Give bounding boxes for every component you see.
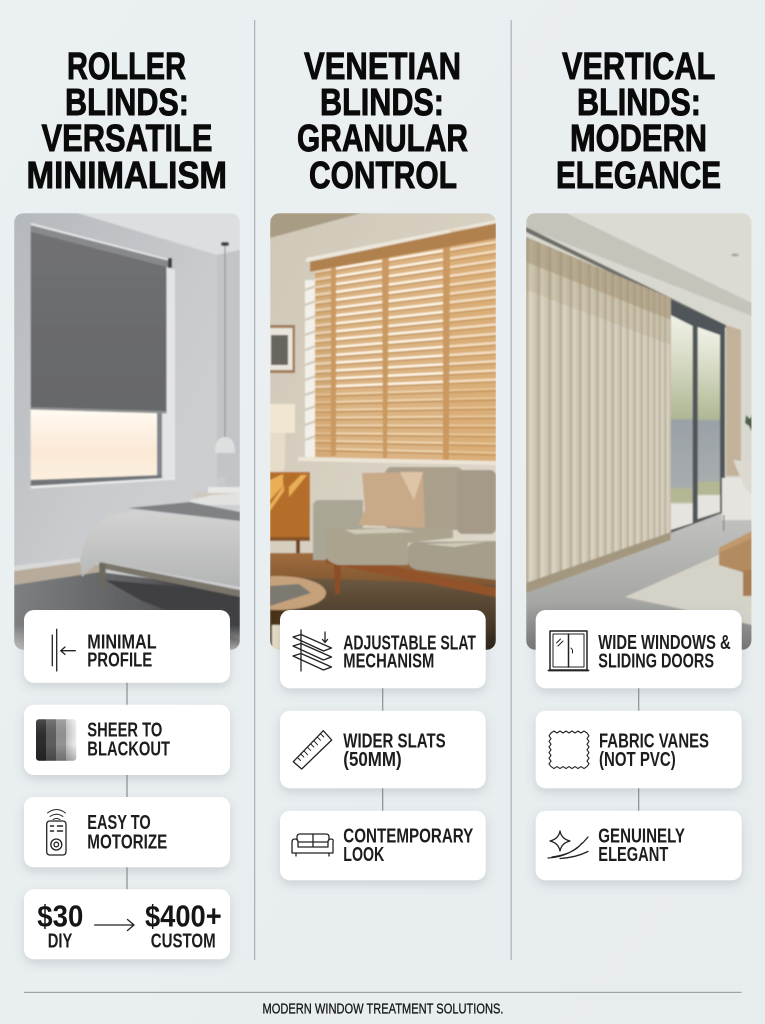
card: easy to motorize bbox=[24, 797, 230, 867]
card: wider slats bbox=[280, 711, 486, 788]
icon: ruler bbox=[293, 731, 332, 769]
heading: vertical blinds: BLINDS: bbox=[577, 82, 701, 124]
heading: venetian blinds: BLINDS: bbox=[320, 82, 444, 124]
icon: fabric swatch bbox=[549, 731, 589, 769]
card: adjustable slat mechanism: ADJUSTABLE SLAT bbox=[343, 632, 476, 654]
arrow: price range bbox=[95, 920, 134, 930]
card: wider slats: (50MM) bbox=[343, 749, 402, 771]
card: minimal profile: MINIMAL bbox=[87, 632, 157, 654]
column: vertical blinds bbox=[526, 46, 752, 880]
card: adjustable slat mechanism: MECHANISM bbox=[343, 651, 434, 673]
icon: sofa bbox=[292, 834, 333, 856]
card: wide windows and sliding doors: SLIDING DOORS bbox=[598, 651, 714, 673]
card: contemporary look: LOOK bbox=[343, 844, 385, 866]
card: contemporary look bbox=[280, 811, 486, 880]
heading: venetian blinds: CONTROL bbox=[309, 155, 457, 197]
heading: venetian blinds: GRANULAR bbox=[297, 118, 468, 160]
photo: living room with wooden venetian blinds bbox=[270, 213, 496, 650]
card: wide windows and sliding doors bbox=[536, 610, 742, 688]
column: roller blinds bbox=[14, 46, 240, 959]
heading: venetian blinds bbox=[297, 46, 468, 197]
card: easy to motorize: EASY TO bbox=[87, 812, 151, 834]
icon: sliding door bbox=[548, 631, 588, 670]
card: wider slats: WIDER SLATS bbox=[343, 730, 446, 752]
heading: vertical blinds: ELEGANCE bbox=[556, 155, 721, 197]
card: price range: CUSTOM bbox=[151, 930, 216, 952]
heading: roller blinds: VERSATILE bbox=[42, 118, 212, 160]
heading: roller blinds bbox=[26, 46, 227, 197]
card: minimal profile: PROFILE bbox=[87, 650, 152, 672]
heading: roller blinds: BLINDS: bbox=[65, 82, 189, 124]
card: genuinely elegant: GENUINELY bbox=[598, 826, 685, 848]
photo: bedroom with grey roller blind bbox=[14, 213, 240, 650]
connector lines bbox=[382, 688, 384, 811]
card: minimal profile bbox=[24, 610, 230, 683]
card: price range: $30 bbox=[37, 899, 83, 934]
column: venetian blinds bbox=[270, 52, 496, 888]
footer: MODERN WINDOW TREATMENT SOLUTIONS. bbox=[262, 1002, 504, 1018]
connector lines bbox=[126, 682, 128, 890]
card: sheer to blackout: BLACKOUT bbox=[87, 739, 170, 761]
heading: roller blinds: ROLLER bbox=[67, 46, 186, 88]
icon: opacity swatch bbox=[36, 719, 76, 761]
heading: vertical blinds: MODERN bbox=[570, 118, 707, 160]
heading: vertical blinds bbox=[556, 46, 721, 197]
card: sheer to blackout bbox=[24, 705, 230, 775]
heading: roller blinds: MINIMALISM bbox=[26, 155, 227, 197]
card: fabric vanes: FABRIC VANES bbox=[599, 730, 709, 752]
icon: remote control bbox=[47, 810, 66, 855]
card: sheer to blackout: SHEER TO bbox=[87, 720, 162, 742]
heading: venetian blinds: VENETIAN bbox=[304, 46, 461, 88]
photo: room with vertical blinds and sliding door bbox=[526, 213, 752, 650]
connector lines bbox=[638, 688, 640, 811]
icon: tilted slats with arrow bbox=[293, 630, 332, 671]
card: fabric vanes bbox=[536, 711, 742, 788]
icon: sparkle and feather bbox=[548, 831, 588, 858]
card: price range: DIY bbox=[48, 930, 73, 952]
icon: profile lines with arrow bbox=[52, 629, 75, 671]
card: contemporary look: CONTEMPORARY bbox=[343, 826, 474, 848]
card: fabric vanes: (NOT PVC) bbox=[599, 749, 676, 771]
card: easy to motorize: MOTORIZE bbox=[87, 831, 167, 853]
card: price range: $400+ bbox=[145, 899, 222, 934]
heading: vertical blinds: VERTICAL bbox=[562, 46, 715, 88]
card: adjustable slat mechanism bbox=[280, 610, 486, 688]
card: price range bbox=[24, 889, 230, 959]
card: genuinely elegant bbox=[536, 811, 742, 880]
card: genuinely elegant: ELEGANT bbox=[598, 844, 668, 866]
